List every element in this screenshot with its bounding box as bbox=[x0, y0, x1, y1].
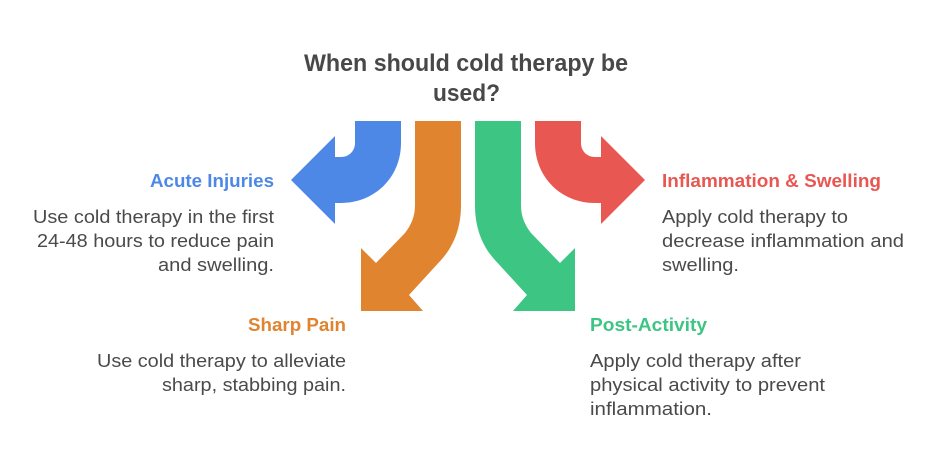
heading: post-activity: Post-Activity bbox=[590, 315, 707, 335]
text: acute injuries description: 24-48 hours to reduce pain bbox=[37, 231, 274, 251]
text: inflammation and swelling description bbox=[662, 207, 904, 275]
text: inflammation and swelling description: swelling. bbox=[662, 255, 739, 275]
text: acute injuries description: and swelling. bbox=[158, 255, 274, 275]
heading: sharp pain: Sharp Pain bbox=[248, 315, 346, 335]
panel: post-activity bbox=[590, 315, 825, 419]
arrow: sharp pain (orange) bbox=[361, 121, 461, 311]
heading: acute injuries: Acute Injuries bbox=[150, 171, 274, 191]
text: post-activity description: Apply cold therapy after bbox=[590, 351, 801, 371]
text: post-activity description bbox=[590, 351, 825, 419]
text: sharp pain description bbox=[97, 351, 346, 395]
text: post-activity description: inflammation. bbox=[590, 399, 712, 419]
title: When should cold therapy be bbox=[304, 50, 628, 77]
text: acute injuries description bbox=[33, 207, 274, 275]
text: sharp pain description: sharp, stabbing pain. bbox=[162, 375, 346, 395]
text: sharp pain description: Use cold therapy to alleviate bbox=[97, 351, 346, 371]
text: post-activity description: physical activity to prevent bbox=[590, 375, 825, 395]
title bbox=[304, 50, 628, 107]
arrow: post-activity (green) bbox=[475, 121, 575, 311]
text: inflammation and swelling description: Apply cold therapy to bbox=[662, 207, 848, 227]
panel: inflammation and swelling bbox=[662, 171, 904, 275]
panel: acute injuries bbox=[33, 171, 274, 275]
text: inflammation and swelling description: decrease inflammation and bbox=[662, 231, 904, 251]
panel: sharp pain bbox=[97, 315, 346, 395]
heading: inflammation and swelling: Inflammation & Swelling bbox=[662, 171, 881, 191]
text: acute injuries description: Use cold therapy in the first bbox=[33, 207, 274, 227]
title: used? bbox=[433, 80, 500, 107]
arrow: acute injuries (blue) bbox=[291, 121, 401, 224]
arrow: inflammation and swelling (red) bbox=[535, 121, 645, 224]
